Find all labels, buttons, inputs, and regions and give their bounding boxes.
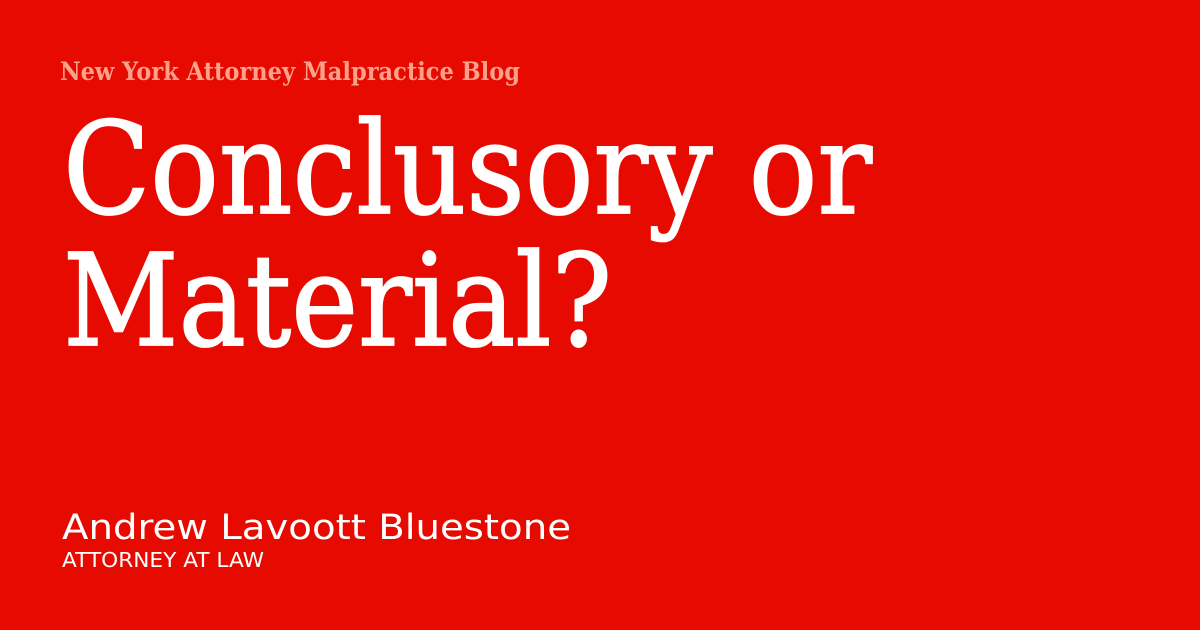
- title: Conclusory or: [63, 95, 872, 243]
- author role: ATTORNEY AT LAW: [62, 548, 264, 572]
- title: Material?: [63, 227, 612, 375]
- author name: Andrew Lavoott Bluestone: [62, 508, 571, 548]
- title: [63, 95, 872, 375]
- blog name: New York Attorney Malpractice Blog: [60, 57, 520, 87]
